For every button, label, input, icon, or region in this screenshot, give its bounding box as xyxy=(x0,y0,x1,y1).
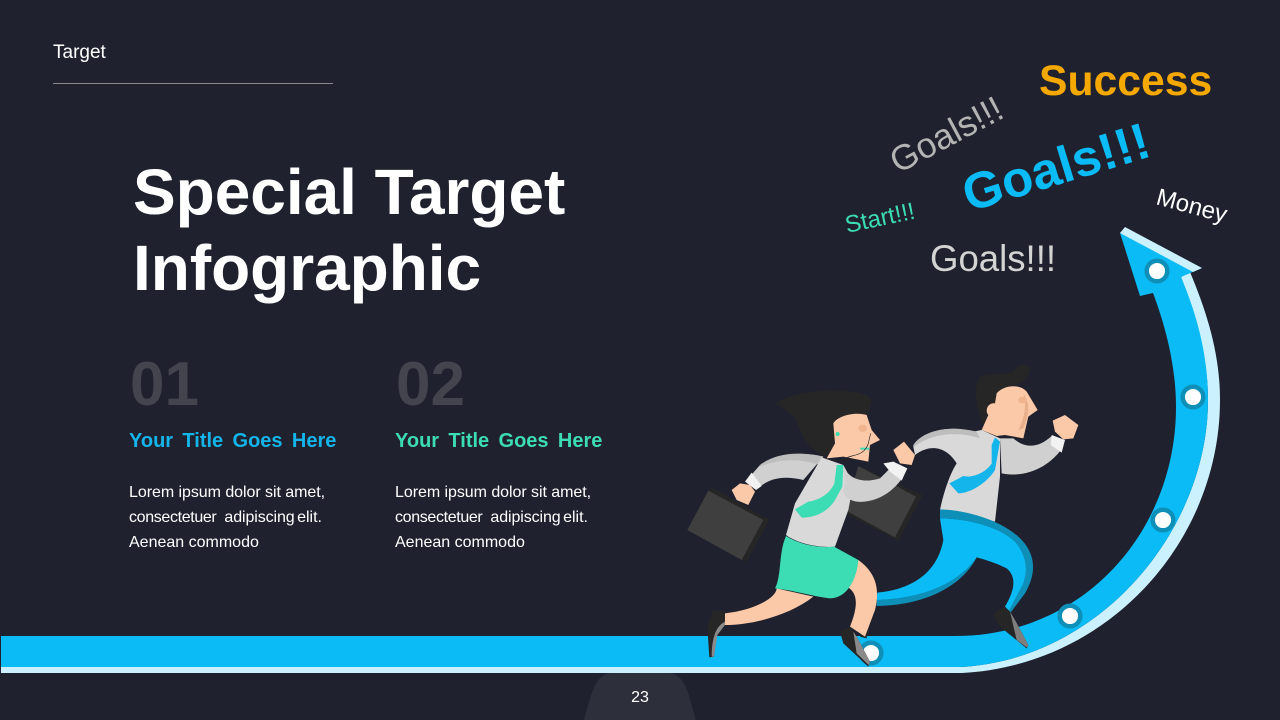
page number tab: 23 xyxy=(631,689,649,706)
number 01: 01 xyxy=(130,350,199,419)
floating words: Goals!!! xyxy=(883,88,1010,181)
column text: Lorem ipsum dolor sit amet, xyxy=(395,484,591,501)
man xyxy=(860,365,1078,648)
woman xyxy=(707,390,915,667)
column text: Aenean commodo xyxy=(129,534,259,551)
column text: consectetuer adipiscingelit. xyxy=(129,509,322,526)
slide label: Target xyxy=(53,42,106,63)
woman's briefcase xyxy=(687,488,769,562)
floating words: Success xyxy=(1039,57,1212,105)
running people xyxy=(687,365,1078,667)
floating words: Goals!!! xyxy=(956,112,1156,223)
column heading: Your Title Goes Here xyxy=(129,430,336,452)
man's briefcase xyxy=(845,466,923,541)
number 02: 02 xyxy=(396,350,465,419)
floating words: Goals!!! xyxy=(930,238,1056,279)
growth arrow xyxy=(1,227,1220,673)
column text xyxy=(395,484,591,551)
column 01 xyxy=(129,350,336,551)
title: Infographic xyxy=(133,232,481,304)
column text xyxy=(129,484,325,551)
column 02 xyxy=(395,350,602,551)
page number tab xyxy=(584,673,696,720)
title xyxy=(133,156,565,304)
trousers xyxy=(940,509,1033,613)
floating words: Money xyxy=(1153,184,1230,228)
floating words xyxy=(843,57,1230,279)
title: Special Target xyxy=(133,156,565,228)
column text: Lorem ipsum dolor sit amet, xyxy=(129,484,325,501)
column heading: Your Title Goes Here xyxy=(395,430,602,452)
floating words: Start!!! xyxy=(843,198,917,239)
milestone dots xyxy=(861,261,1203,663)
column text: Aenean commodo xyxy=(395,534,525,551)
column text: consectetuer adipiscingelit. xyxy=(395,509,588,526)
